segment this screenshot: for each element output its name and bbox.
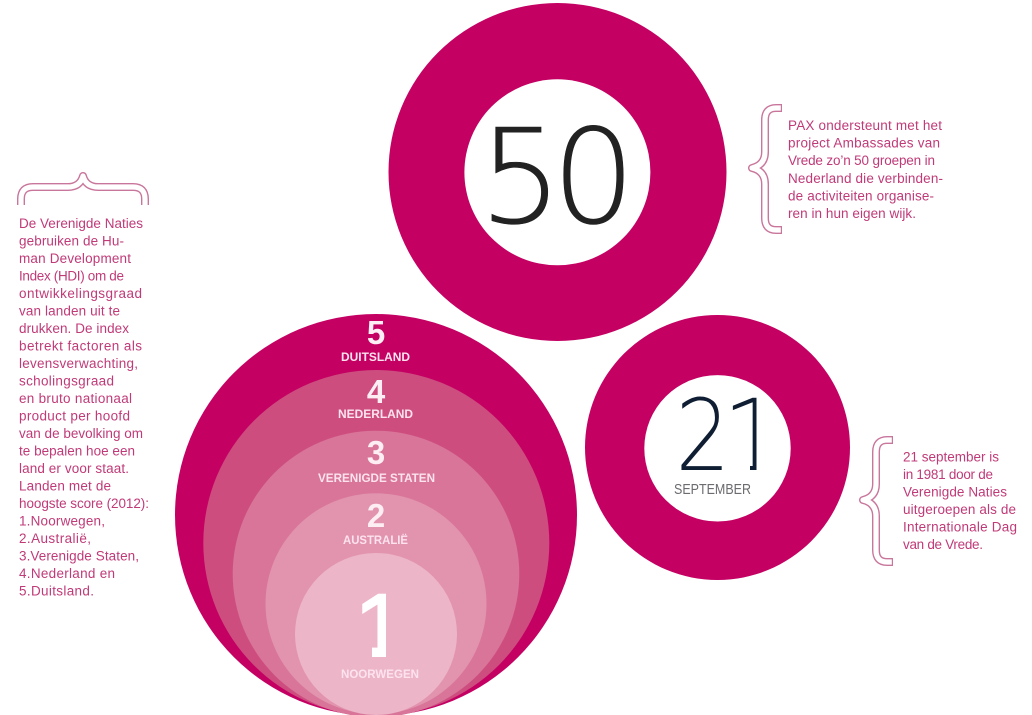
inner white disc: 50 xyxy=(464,79,650,265)
inner white disc: 21 xyxy=(644,375,791,522)
text block: HDI explanation: van de bevolking om xyxy=(19,426,143,441)
text block: HDI explanation: product per hoofd xyxy=(19,408,130,424)
text block: HDI explanation: 4.Nederland en xyxy=(19,566,115,581)
text block: HDI explanation: te bepalen hoe een xyxy=(19,444,135,458)
rank 4: 4 xyxy=(367,373,386,410)
text block: HDI explanation: man Development xyxy=(19,251,131,266)
text block: HDI explanation: gebruiken de Hu- xyxy=(19,234,124,248)
text block: Ambassades van Vrede: de activiteiten organise- xyxy=(788,188,934,203)
text block: 21 september xyxy=(903,450,1017,552)
text block: HDI explanation: Index (HDI) om de xyxy=(19,268,124,284)
text block: 21 september: Internationale Dag xyxy=(903,520,1017,534)
rank 2: 2 xyxy=(367,497,385,534)
text block: Ambassades van Vrede xyxy=(788,118,943,221)
rank 1 glyph: 1 xyxy=(356,575,407,677)
text block: 21 september: van de Vrede. xyxy=(903,537,983,552)
circle 1 xyxy=(295,553,457,715)
text block: HDI explanation: drukken. De index xyxy=(19,321,129,336)
rank 5: 5 xyxy=(367,314,385,351)
country: Australië: AUSTRALIË xyxy=(343,532,408,547)
text block: 21 september: Verenigde Naties xyxy=(903,484,1007,500)
circle 5 xyxy=(175,314,577,715)
text block: Ambassades van Vrede: Nederland die verbinden- xyxy=(788,171,943,186)
country: Nederland: NEDERLAND xyxy=(338,407,413,421)
country: Noorwegen: NOORWEGEN xyxy=(341,667,419,681)
circle 2 xyxy=(266,493,486,714)
label: september: SEPTEMBER xyxy=(674,482,751,498)
panel: 21 september circle xyxy=(585,315,850,580)
text block: 21 september: in 1981 door de xyxy=(903,467,993,482)
text block: Ambassades van Vrede: ren in hun eigen wijk. xyxy=(788,206,916,221)
number: 5 of 50: 5 xyxy=(479,100,562,254)
text block: HDI explanation: ontwikkelingsgraad xyxy=(19,286,142,301)
text block: HDI explanation: betrekt factoren als xyxy=(19,338,142,354)
country: Verenigde Staten: VERENIGDE STATEN xyxy=(318,471,435,485)
ring: 50 xyxy=(388,3,726,341)
country: Duitsland: DUITSLAND xyxy=(341,350,410,364)
text block: 21 september: 21 september is xyxy=(903,450,999,464)
ring: 21 xyxy=(585,315,850,580)
text block: HDI explanation: scholingsgraad xyxy=(19,374,114,388)
icon: brace beside 21 text xyxy=(863,440,893,562)
number: 2 of 21: 2 xyxy=(676,378,730,493)
icon: brace beside 50 text xyxy=(752,108,782,230)
text block: Ambassades van Vrede: project Ambassades van xyxy=(788,136,940,151)
panel: HDI nested circles xyxy=(175,314,577,715)
text block: HDI explanation: Landen met de xyxy=(19,478,111,494)
text block: HDI explanation: De Verenigde Naties xyxy=(19,216,143,231)
text block: HDI explanation: levensverwachting, xyxy=(19,356,138,371)
text block: HDI explanation: 1.Noorwegen, xyxy=(19,514,105,528)
number: 1 glyph of 21: 1 xyxy=(722,379,785,494)
icon: horizontal brace above HDI text xyxy=(21,176,145,206)
panel: 50 circle xyxy=(388,3,726,341)
text block: HDI explanation: hoogste score (2012): xyxy=(19,496,149,511)
circle 3 xyxy=(233,431,519,715)
text block: HDI explanation: 5.Duitsland. xyxy=(19,584,94,598)
text block: HDI explanation: van landen uit te xyxy=(19,304,120,318)
text block: HDI explanation: land er voor staat. xyxy=(19,461,129,476)
text block: Ambassades van Vrede: Vrede zo’n 50 groepen in xyxy=(788,153,935,168)
text block: HDI explanation: en bruto nationaal xyxy=(19,391,132,406)
text block: HDI explanation: 2.Australië, xyxy=(19,531,91,546)
circle 4 xyxy=(203,370,549,715)
text block: 21 september: uitgeroepen als de xyxy=(903,502,1016,517)
text block: Ambassades van Vrede: PAX ondersteunt met het xyxy=(788,118,942,133)
text block: HDI explanation: 3.Verenigde Staten, xyxy=(19,548,139,564)
number: 0 of 50: 0 xyxy=(552,100,635,254)
text block: HDI explanation xyxy=(19,216,149,598)
rank 3: 3 xyxy=(367,434,385,471)
